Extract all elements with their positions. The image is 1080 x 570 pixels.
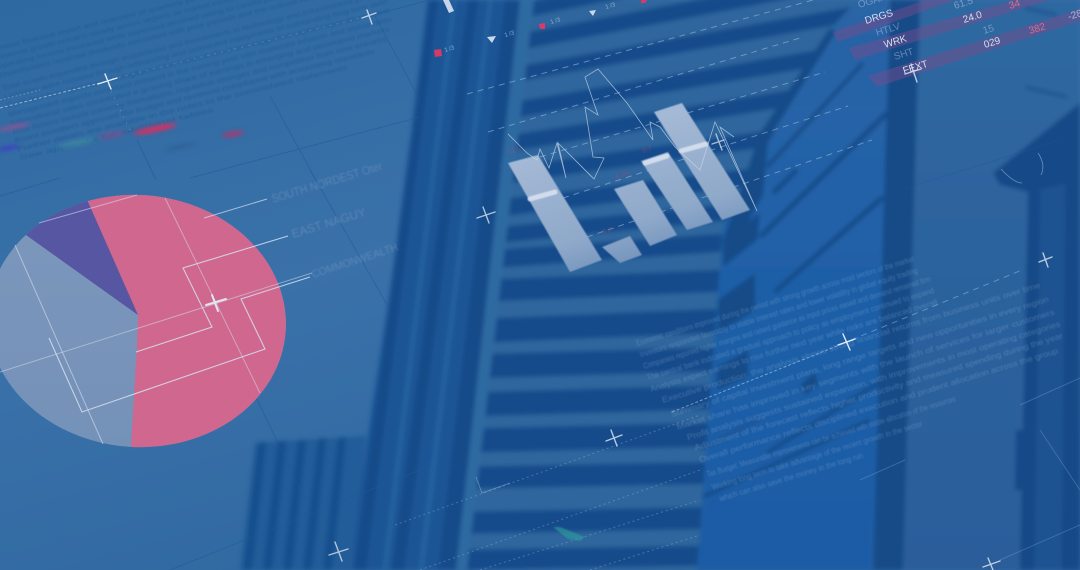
red chart value labels: 0.7 bbox=[642, 145, 653, 155]
text block: top-left report: Cash flow from operations strengthened the balance sheet and supported capital expenditure plans bbox=[6, 7, 392, 110]
label: south: SOUTH NORDEST Oter bbox=[270, 159, 384, 206]
right dark building bbox=[1020, 150, 1080, 570]
bar 5 bbox=[654, 103, 750, 220]
text block: top-left report: See appendix for additional tables bbox=[19, 107, 216, 162]
striped tower base bbox=[400, 0, 860, 570]
photo: blurred skyscrapers bbox=[240, 0, 1080, 570]
dashed chart gridlines bbox=[467, 0, 872, 237]
row: SHT: SHT bbox=[893, 47, 915, 63]
pie chart callout lines bbox=[0, 195, 312, 444]
marker: white bar bbox=[443, 0, 454, 13]
slice: gray bbox=[0, 190, 300, 455]
front glass building bbox=[697, 0, 895, 570]
marker: white triangle bbox=[487, 36, 496, 43]
colored highlights in report bbox=[0, 121, 244, 152]
ticker table: 382 bbox=[1028, 21, 1047, 37]
ticker table: 24.0 bbox=[962, 10, 984, 26]
row: FEXT: FEXT bbox=[902, 59, 929, 77]
bar chart bbox=[508, 103, 750, 272]
red chart value labels: 12.5 bbox=[507, 145, 522, 156]
text block: lower-right article: Executive production: the analysis shows strong financial returns from business units over time bbox=[661, 281, 1042, 405]
low building bbox=[240, 436, 366, 570]
label: commonwealth: COMMONWEALTH bbox=[310, 242, 400, 281]
top markers row bbox=[434, 0, 647, 57]
text block: top-left report: Shareholders received dividends consistent with prior periods and the outlook remains positive bbox=[0, 0, 364, 80]
light pillar bbox=[447, 0, 534, 570]
marker: white triangle bbox=[589, 10, 596, 16]
dark tower streaks bbox=[354, 0, 520, 570]
dark tower bbox=[352, 0, 520, 570]
line chart bbox=[508, 69, 757, 211]
ticker table bbox=[857, 0, 1080, 77]
striped tower window bands bbox=[450, 0, 860, 560]
bar 2 bbox=[602, 236, 642, 263]
bar 4 bbox=[641, 152, 713, 230]
text block: lower-right article: Companies reported higher margins and raised guidance as input prices eased and demand remained firm bbox=[642, 275, 932, 371]
bar highlights bbox=[530, 144, 706, 199]
cross 7 bbox=[606, 430, 622, 446]
dotted line: right bbox=[672, 270, 1022, 412]
text block: lower-right article bbox=[635, 219, 1080, 513]
text block: top-left report: Total assets expanded through acquisitions and investments in technology and infrastructure projects bbox=[1, 0, 387, 92]
cross 8 bbox=[329, 542, 348, 561]
cross 1 bbox=[98, 74, 117, 89]
roof arc bbox=[1001, 153, 1043, 183]
text block: top-left report: Management expects continued demand in the coming year with moderate inflation and stable rates bbox=[8, 16, 394, 118]
text block: top-left report: Risk factors include currency fluctuations, regulation changes and competition from new entrants bbox=[12, 36, 388, 136]
text block: lower-right article: Overall performance reflects disciplined execution and prudent allocation across the group bbox=[698, 346, 1060, 465]
marker labels bbox=[444, 2, 617, 54]
front building dark windows bbox=[723, 213, 760, 267]
dotted line: top-left bbox=[0, 17, 365, 130]
marker: red bbox=[434, 49, 442, 57]
cross 4 bbox=[477, 207, 495, 223]
text block: lower-right article: which can also save the money in the long run bbox=[717, 451, 864, 504]
lower dashed lines bbox=[395, 415, 700, 570]
right building roof bbox=[993, 103, 1080, 192]
red chart value labels: 4.2 bbox=[602, 226, 613, 236]
row: WRK: WRK bbox=[883, 33, 909, 51]
text block: lower-right article: Investors responded favorably to stable interest rates and lower volatility in global equity trading bbox=[639, 266, 919, 359]
bar 3 bbox=[614, 180, 677, 246]
text block: lower-right article: Tax Budget: Measurable improvements can be achieved with stable allocation of the resources bbox=[706, 394, 957, 479]
red chart value labels: 8.0% bbox=[615, 170, 632, 181]
faint light lines: right bbox=[860, 378, 1080, 560]
right building streaks bbox=[1015, 170, 1080, 570]
text block: lower-right article: Working long term to take advantage of the recent growth in the sector bbox=[711, 419, 924, 492]
text block: top-left report: Liabilities were reduced through refinancing and scheduled repayments of outstanding long term debt bbox=[3, 0, 389, 101]
pie chart labels bbox=[270, 159, 400, 281]
slice: purple bbox=[10, 180, 138, 315]
roof antenna lines bbox=[1025, 8, 1067, 97]
label: east: EAST NAGUY bbox=[290, 205, 368, 241]
marker labels: 1 /3 bbox=[605, 2, 617, 11]
pie chart bbox=[0, 194, 286, 448]
text block: lower-right article: Economic conditions improved during the period with strong growth across most sectors of the market bbox=[635, 254, 916, 348]
row: HTLV: HTLV bbox=[875, 21, 902, 39]
cross 9 bbox=[905, 64, 921, 82]
text block: top-left report: Further details are available in the notes to the consolidated statements bbox=[16, 64, 349, 153]
text block: top-left report: International sales contributed a growing share of earnings in emerging and developed markets bbox=[10, 26, 391, 127]
tower light streaks bbox=[382, 0, 493, 570]
text block: lower-right article: Market share has improved in key segments with the launch of services for larger customers bbox=[675, 308, 1056, 432]
text block: lower-right article: Summary of capital investment plans, long range targets and new opportunities in every region bbox=[669, 295, 1050, 419]
marker labels: 1 /3 bbox=[504, 30, 516, 39]
row: DRGS: DRGS bbox=[864, 8, 895, 27]
text block: lower-right article: Analysts expect earnings to rise further next year while risks are balanced overall bbox=[649, 297, 939, 394]
teal highlight bbox=[553, 527, 585, 541]
front building dark edge bbox=[723, 28, 836, 262]
text block: lower-right article: Adjustment of the forecast reflects higher productivity and measured spending during the year bbox=[693, 331, 1064, 453]
slice: pink bbox=[88, 194, 286, 448]
cross 11 (on chart) bbox=[712, 134, 724, 150]
text block: lower-right article: Profit analysis suggests sustained expansion, with improvements in most operating categories bbox=[686, 320, 1062, 442]
ticker table: 15 bbox=[982, 23, 996, 37]
text block: top-left report: Board members approved the budget and reviewed compliance with accounting standards bbox=[14, 48, 376, 145]
bar 1 bbox=[508, 155, 602, 272]
cross 6 bbox=[1039, 253, 1052, 267]
cross 10 bbox=[983, 558, 1000, 570]
text block: top-left report bbox=[0, 0, 405, 162]
text block: lower-right article: The central bank indicated a gradual approach to policy as employment continued to expand bbox=[646, 286, 935, 382]
mid light building bbox=[880, 0, 1080, 570]
marker labels: 1 /3 bbox=[444, 45, 456, 54]
ticker table: 029 bbox=[983, 35, 1002, 51]
red chart value labels bbox=[507, 145, 653, 236]
cross 3 (on pie) bbox=[206, 295, 226, 311]
ticker bands bbox=[833, 0, 1080, 87]
marker: red bbox=[641, 0, 647, 3]
corner bracket bbox=[476, 477, 510, 493]
dark column bbox=[873, 0, 920, 570]
low building columns bbox=[243, 437, 346, 570]
marker labels: 1 /3 bbox=[550, 17, 562, 26]
front building diagonal shadows bbox=[700, 63, 887, 497]
cross 5 bbox=[838, 334, 855, 350]
cross 2 bbox=[362, 10, 376, 24]
marker: red bbox=[539, 23, 545, 29]
